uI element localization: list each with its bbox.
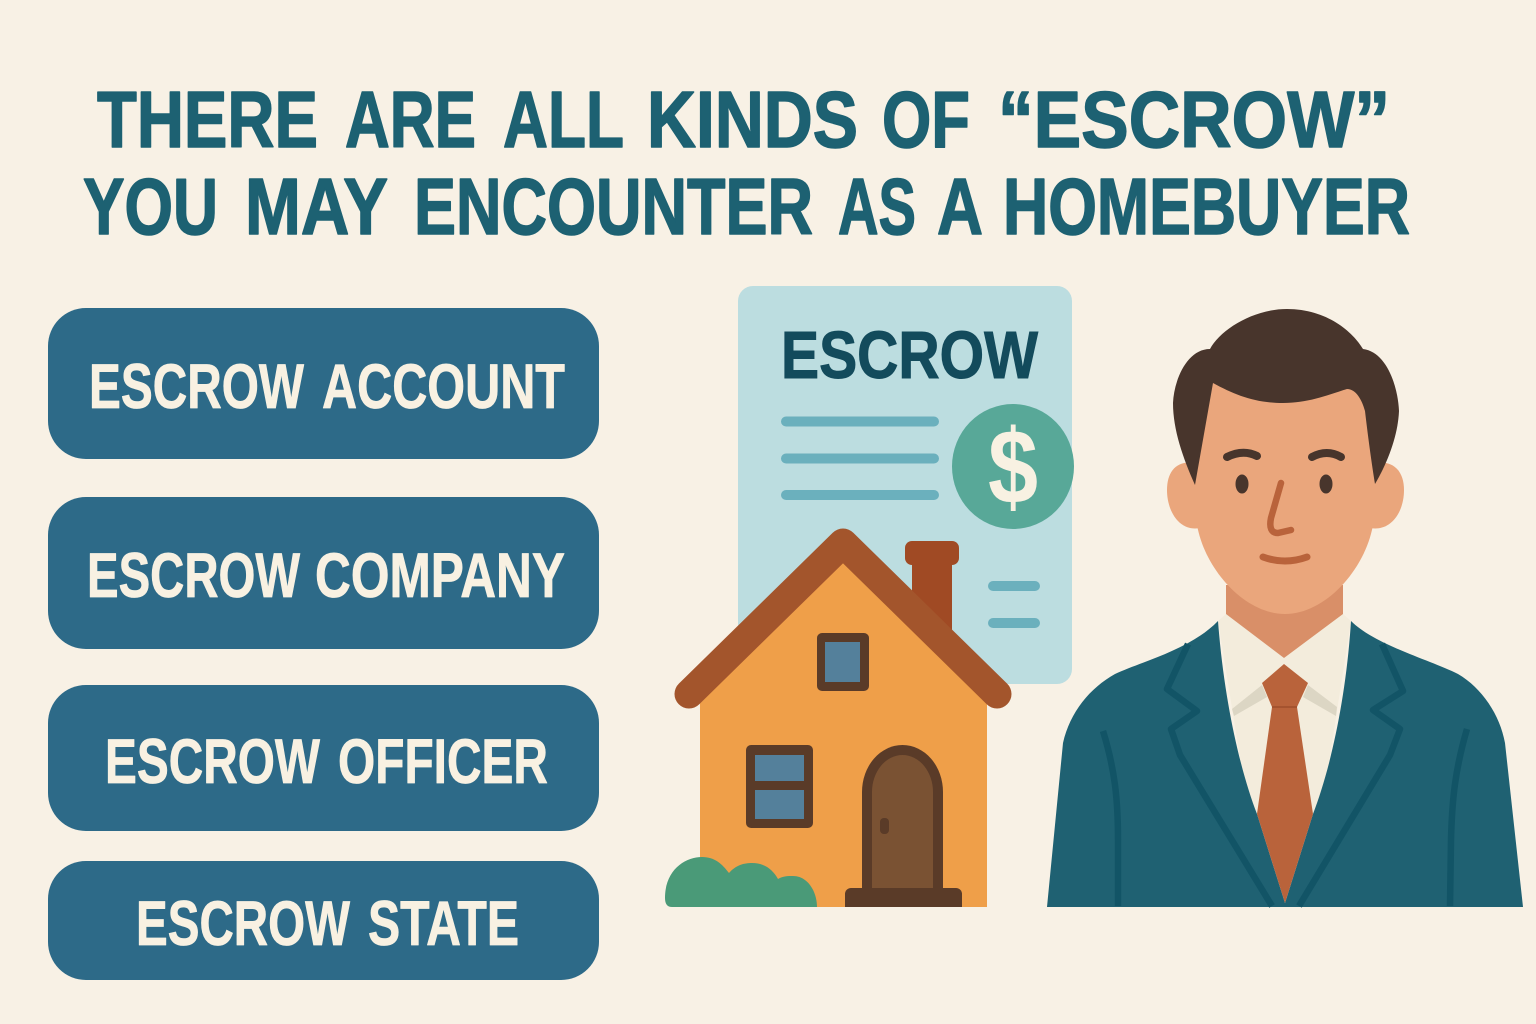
eyebrows — [1227, 453, 1341, 457]
face — [1195, 370, 1375, 614]
title: YOU — [83, 162, 218, 251]
hair — [1173, 309, 1399, 485]
button: escrow state — [48, 861, 599, 980]
title: THERE — [97, 75, 318, 164]
button: escrow company — [48, 497, 599, 649]
person: man in suit — [1047, 309, 1523, 907]
bush — [665, 857, 817, 907]
button: escrow account: ACCOUNT — [322, 352, 565, 422]
document heading: ESCROW — [781, 318, 1039, 393]
title: ENCOUNTER — [414, 162, 813, 251]
icon: dollar coin: $ — [988, 408, 1038, 526]
button: escrow officer: ESCROW — [105, 727, 320, 797]
mouth — [1263, 557, 1307, 561]
title: OF — [882, 75, 970, 164]
icon: dollar coin — [952, 404, 1074, 529]
button: escrow account — [48, 308, 599, 459]
ears — [1167, 462, 1404, 529]
panel: escrow document — [738, 286, 1074, 684]
button: escrow officer — [48, 685, 599, 831]
roof — [689, 543, 997, 694]
title: HOMEBUYER — [1003, 162, 1410, 251]
shirt collar — [1218, 614, 1351, 820]
title: ARE — [345, 75, 476, 164]
title: ALL — [503, 75, 624, 164]
house body — [700, 556, 987, 907]
jacket lapel and seam lines — [1103, 644, 1467, 906]
upper window — [817, 633, 869, 691]
neck — [1226, 585, 1343, 660]
suit jacket — [1047, 621, 1523, 907]
button: escrow company: COMPANY — [315, 541, 565, 611]
button: escrow company: ESCROW — [87, 541, 300, 611]
door step — [845, 888, 962, 907]
collar shadows — [1232, 685, 1337, 716]
panel: list of escrow types — [48, 308, 599, 980]
title: “ESCROW” — [998, 75, 1390, 164]
necktie — [1257, 664, 1313, 903]
nose — [1270, 483, 1291, 533]
title: MAY — [245, 162, 388, 251]
button: escrow state: STATE — [368, 889, 519, 959]
icon: house — [665, 541, 997, 907]
button: escrow officer: OFFICER — [338, 727, 548, 797]
title: AS — [838, 162, 916, 251]
title: KINDS — [647, 75, 858, 164]
eyes — [1236, 474, 1332, 494]
title: A — [937, 162, 983, 251]
chimney — [905, 541, 959, 640]
door — [862, 745, 943, 890]
document text lines — [781, 416, 1040, 628]
button: escrow state: ESCROW — [136, 889, 350, 959]
lower window — [746, 745, 813, 828]
title — [83, 75, 1410, 251]
button: escrow account: ESCROW — [89, 352, 304, 422]
